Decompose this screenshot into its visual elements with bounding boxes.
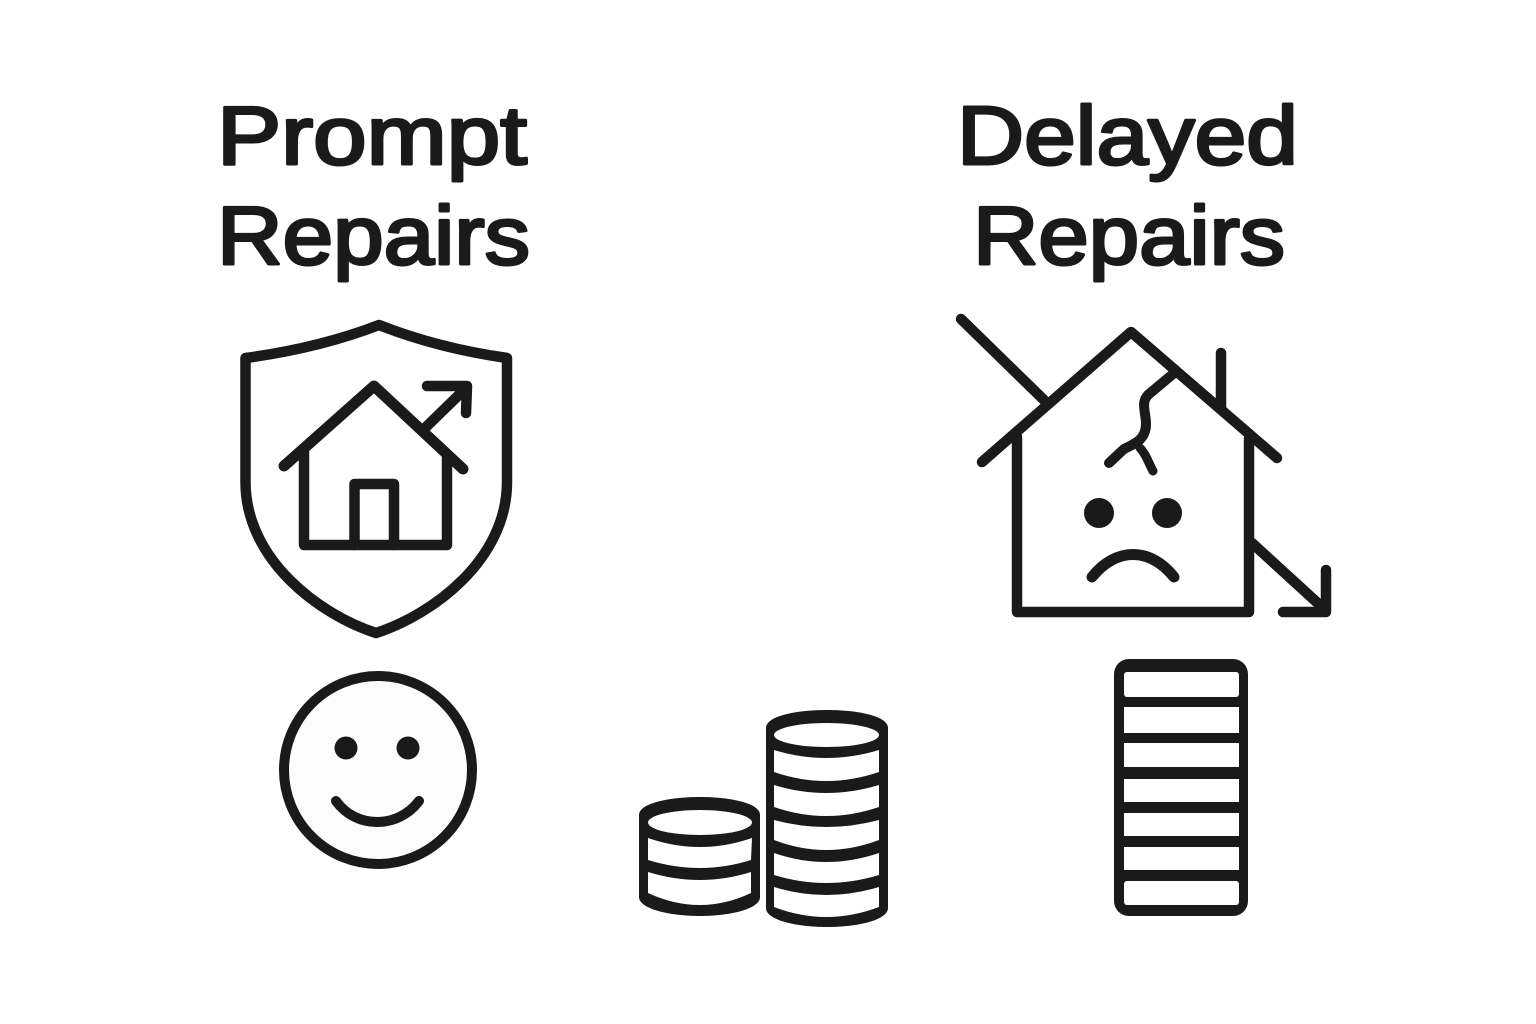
heading: Delayed Repairs [957, 89, 1298, 282]
icon: tall stacked block [1114, 659, 1248, 916]
short coin stack [639, 797, 760, 916]
heading: Delayed Repairs: Delayed [957, 89, 1298, 182]
heading: Prompt Repairs [217, 89, 530, 282]
icon: smiley face [284, 676, 472, 864]
tall coin stack [766, 710, 888, 927]
icon: coin stacks [639, 710, 888, 927]
icon: shield with house and rising arrow [246, 325, 507, 633]
heading: Prompt Repairs: Repairs [217, 189, 530, 282]
heading: Prompt Repairs: Prompt [217, 89, 527, 182]
heading: Delayed Repairs: Repairs [973, 189, 1285, 282]
icon: damaged house with sad face and falling arrow [961, 319, 1326, 612]
